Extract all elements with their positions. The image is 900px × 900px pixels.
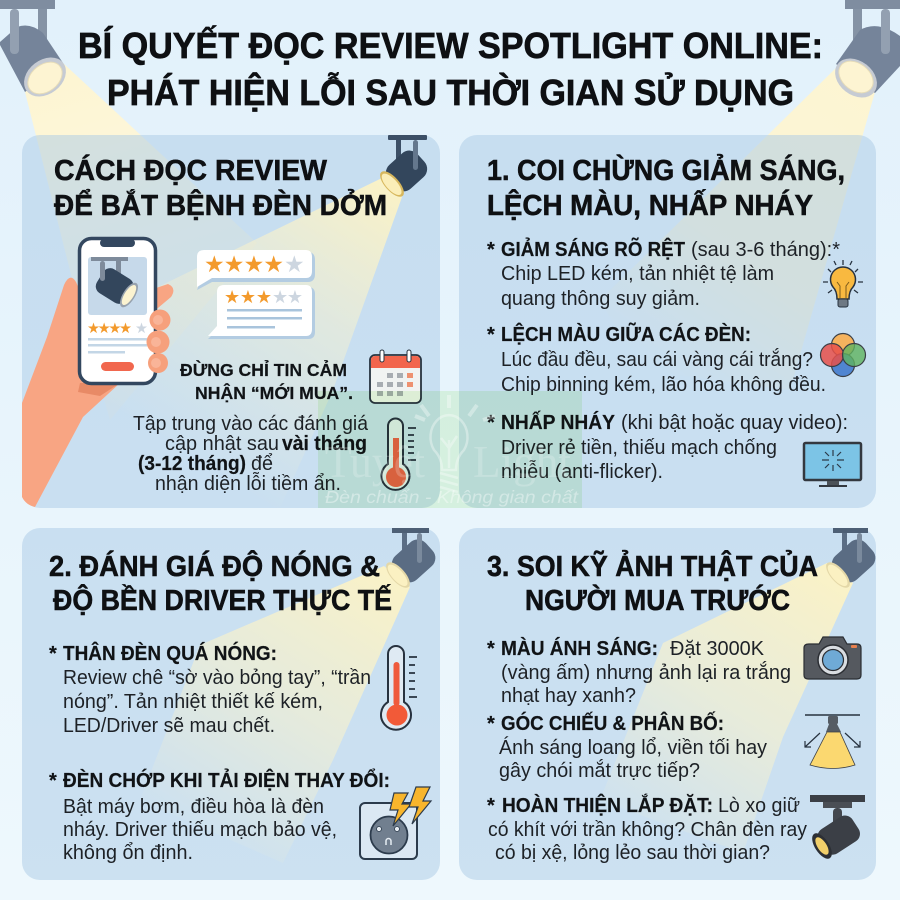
icon: review bubble four stars: ★★★★ bbox=[204, 251, 284, 277]
illustration: hand holding phone bbox=[22, 238, 173, 507]
text block: focus on later reviews: cập nhật sau bbox=[165, 432, 279, 455]
text block: beam angle: Ánh sáng loang lổ, viền tối hay bbox=[499, 736, 768, 759]
icon: thermometer bbox=[381, 646, 417, 730]
text block: overheating body: * bbox=[49, 643, 57, 665]
text block: light colour: MÀU ÁNH SÁNG: bbox=[501, 637, 658, 660]
heading: section 1: 1. COI CHỪNG GIẢM SÁNG, bbox=[487, 153, 845, 187]
icon: camera bbox=[804, 637, 861, 679]
subheading: don't trust first impressions bbox=[180, 359, 353, 403]
heading: section 1: LỆCH MÀU, NHẤP NHÁY bbox=[487, 188, 813, 222]
text block: dimming: GIẢM SÁNG RÕ RỆT bbox=[501, 237, 685, 261]
text block: colour shift bbox=[487, 322, 826, 396]
text block: light colour: (vàng ấm) nhưng ảnh lại ra trắng bbox=[501, 661, 791, 684]
subheading: don't trust first impressions: NHẬN “MỚI MUA”. bbox=[195, 382, 353, 403]
text block: colour shift: * bbox=[487, 324, 495, 346]
text block: installation finish bbox=[487, 793, 808, 864]
title: BÍ QUYẾT ĐỌC REVIEW SPOTLIGHT ONLINE: bbox=[78, 25, 823, 66]
text block: installation finish: có bị xệ, lỏng lẻo sau thời gian? bbox=[495, 841, 770, 864]
icon: thermometer bbox=[382, 419, 416, 490]
text block: installation finish: Lò xo giữ bbox=[718, 794, 800, 817]
text block: flicker: nhiễu (anti-flicker). bbox=[501, 460, 663, 483]
title: PHÁT HIỆN LỖI SAU THỜI GIAN SỬ DỤNG bbox=[107, 71, 794, 113]
icon: track light bbox=[808, 795, 865, 862]
text block: dimming: (sau 3-6 tháng):* bbox=[691, 238, 840, 261]
heading: section 3: 3. SOI KỸ ẢNH THẬT CỦA bbox=[487, 549, 818, 583]
text block: flashing under load: Bật máy bơm, điều hòa là đèn bbox=[63, 795, 324, 818]
icon: panel spotlight bbox=[822, 528, 880, 592]
text block: colour shift: LỆCH MÀU GIỮA CÁC ĐÈN: bbox=[501, 322, 751, 346]
icon: review bubble three stars bbox=[208, 285, 315, 339]
panel: dimming, colour shift, flicker bbox=[459, 135, 876, 508]
light beam: panel lamp bbox=[156, 566, 410, 844]
watermark bbox=[318, 391, 582, 508]
heading: section 2: 2. ĐÁNH GIÁ ĐỘ NÓNG & bbox=[49, 549, 380, 583]
light beam: panel lamp bbox=[158, 178, 402, 454]
heading: section 2: ĐỘ BỀN DRIVER THỰC TẾ bbox=[53, 583, 392, 617]
text block: flashing under load: không ổn định. bbox=[63, 841, 193, 864]
text block: overheating body: nóng”. Tản nhiệt thiết kế kém, bbox=[63, 690, 323, 713]
heading: how to read reviews: ĐỂ BẮT BỆNH ĐÈN DỞM bbox=[54, 188, 387, 222]
icon: light bulb bbox=[823, 260, 863, 307]
text block: flashing under load: nháy. Driver thiếu mạch bảo vệ, bbox=[63, 818, 337, 841]
text block: overheating body: Review chê “sờ vào bỏng tay”, “trần bbox=[63, 666, 371, 689]
text block: beam angle: * bbox=[487, 713, 495, 735]
text block: colour shift: Chip binning kém, lão hóa không đều. bbox=[501, 373, 826, 396]
text block: focus on later reviews: (3-12 tháng) bbox=[138, 453, 246, 475]
text block: colour shift: Lúc đầu đều, sau cái vàng cái trắng? bbox=[501, 348, 813, 371]
fingers bbox=[150, 310, 170, 330]
text block: focus on later reviews: nhận diện lỗi tiềm ẩn. bbox=[155, 472, 341, 495]
light beam: top left spotlight bbox=[25, 63, 257, 420]
text block: dimming: quang thông suy giảm. bbox=[501, 287, 700, 310]
text block: flicker: Driver rẻ tiền, thiếu mạch chống bbox=[501, 436, 777, 459]
text block: focus on later reviews: Tập trung vào các đánh giá bbox=[133, 412, 369, 435]
icon: power socket with lightning bbox=[360, 787, 431, 859]
icon: review bubble three stars: ★★★ bbox=[224, 287, 272, 307]
icon: review bubble four stars: ★ bbox=[284, 251, 305, 277]
text block: installation finish: * bbox=[487, 795, 495, 817]
text block: dimming bbox=[487, 237, 840, 310]
icon: top right spotlight bbox=[827, 0, 900, 106]
icon: panel spotlight bbox=[382, 528, 440, 592]
light beam: top right spotlight bbox=[600, 67, 875, 390]
heading: section 3 bbox=[487, 549, 818, 617]
text block: focus on later reviews bbox=[133, 412, 369, 495]
text block: light colour: Đặt 3000K bbox=[670, 637, 764, 660]
heading: how to read reviews: CÁCH ĐỌC REVIEW bbox=[54, 153, 328, 187]
icon: review bubble four stars bbox=[197, 250, 315, 290]
text block: light colour: * bbox=[487, 638, 495, 660]
light beam: panel lamp bbox=[600, 563, 853, 853]
icon: calendar bbox=[370, 350, 421, 403]
text block: overheating body: THÂN ĐÈN QUÁ NÓNG: bbox=[63, 641, 277, 665]
watermark: Đèn chuẩn - Không gian chất bbox=[325, 487, 579, 507]
panel: heat and driver durability bbox=[22, 528, 440, 880]
heading: how to read reviews bbox=[54, 153, 387, 222]
text block: installation finish: HOÀN THIỆN LẮP ĐẶT: bbox=[502, 793, 713, 817]
watermark bulb bbox=[415, 395, 495, 492]
text block: beam angle: GÓC CHIẾU & PHÂN BỐ: bbox=[501, 711, 724, 735]
icon: overlapping colour circles bbox=[820, 334, 866, 376]
phone: ★ bbox=[135, 321, 148, 337]
text block: flashing under load: ĐÈN CHỚP KHI TẢI ĐIỆN THAY ĐỔI: bbox=[63, 768, 390, 792]
heading: section 3: NGƯỜI MUA TRƯỚC bbox=[525, 583, 790, 617]
phone: ★★★★ bbox=[87, 321, 132, 337]
text block: installation finish: có khít với trần không? Chân đèn ray bbox=[488, 818, 808, 841]
text block: focus on later reviews: để bbox=[251, 452, 273, 475]
watermark: Tuyệt bbox=[325, 436, 425, 487]
text block: flashing under load bbox=[49, 768, 390, 864]
text block: beam angle bbox=[487, 711, 768, 782]
icon: ceiling light distribution bbox=[805, 715, 860, 768]
heading: section 1 bbox=[487, 153, 845, 222]
icon: panel spotlight bbox=[376, 135, 432, 201]
text block: flashing under load: * bbox=[49, 770, 57, 792]
panel: real photos from buyers bbox=[459, 528, 880, 880]
text block: flicker: * bbox=[487, 412, 495, 434]
hand bbox=[22, 278, 173, 507]
subheading: don't trust first impressions: ĐỪNG CHỈ TIN CẢM bbox=[180, 359, 347, 380]
text block: flicker: NHẤP NHÁY bbox=[501, 411, 616, 434]
icon: flickering monitor bbox=[804, 443, 861, 487]
text block: overheating body bbox=[49, 641, 371, 737]
title bbox=[78, 25, 823, 113]
text block: dimming: Chip LED kém, tản nhiệt tệ làm bbox=[501, 262, 774, 285]
text block: flicker: (khi bật hoặc quay video): bbox=[621, 411, 848, 434]
text block: light colour bbox=[487, 637, 791, 707]
icon: top left spotlight bbox=[0, 0, 74, 105]
icon: review bubble three stars: ★★ bbox=[272, 287, 303, 307]
text block: flicker bbox=[487, 411, 848, 483]
text block: overheating body: LED/Driver sẽ mau chết. bbox=[63, 714, 275, 737]
heading: section 2 bbox=[49, 549, 392, 617]
panel: how to read reviews bbox=[22, 135, 440, 508]
text block: light colour: nhạt hay xanh? bbox=[501, 684, 636, 707]
text block: focus on later reviews: vài tháng bbox=[282, 433, 367, 455]
watermark: Light bbox=[473, 436, 571, 487]
text block: beam angle: gây chói mắt trực tiếp? bbox=[499, 759, 700, 782]
phone bbox=[80, 238, 156, 384]
text block: dimming: * bbox=[487, 239, 495, 261]
